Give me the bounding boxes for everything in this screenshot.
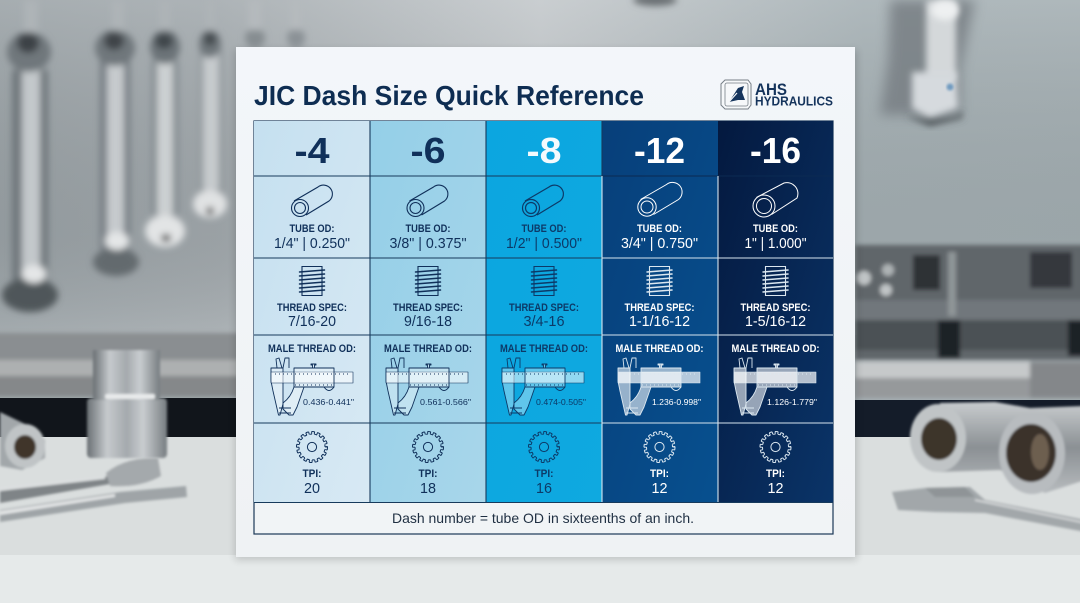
icon: tube [638, 182, 682, 216]
tube OD [621, 223, 698, 252]
icon: caliper [386, 358, 468, 415]
shelf, left [0, 333, 240, 397]
thread spec: THREAD SPEC: [277, 302, 347, 314]
thread spec: THREAD SPEC: [624, 302, 694, 314]
icon: thread [647, 266, 672, 296]
thread spec: 3/4-16 [524, 313, 564, 330]
thread spec: THREAD SPEC: [509, 302, 579, 314]
tube OD: TUBE OD: [522, 223, 566, 235]
icon: thread [300, 266, 324, 296]
male thread OD label: MALE THREAD OD: [500, 343, 588, 355]
reference card [236, 47, 855, 557]
thread spec: THREAD SPEC: [740, 302, 810, 314]
icon: caliper [271, 358, 353, 415]
icon: caliper [502, 358, 584, 415]
table surface [0, 437, 1080, 603]
dash number: -6 [410, 130, 446, 171]
male thread OD label: MALE THREAD OD: [268, 343, 356, 355]
logo: AHS Hydraulics [721, 80, 833, 109]
logo wordmark: AHS [755, 80, 787, 99]
thread spec [277, 302, 347, 330]
socket, left centre [87, 350, 167, 458]
wall [0, 0, 1080, 335]
column: -6 [370, 121, 486, 502]
logo wordmark [755, 80, 833, 108]
icon: thread [416, 266, 440, 296]
icon: caliper [734, 358, 816, 415]
male thread OD value: 0.474-0.505" [536, 397, 586, 407]
icon: gear [412, 432, 444, 462]
TPI: 12 [768, 480, 784, 497]
TPI [302, 468, 322, 497]
thread spec: THREAD SPEC: [393, 302, 463, 314]
tube OD: TUBE OD: [406, 223, 450, 235]
thread spec [393, 302, 463, 330]
thread spec: 1-1/16-12 [629, 313, 690, 330]
tube OD [744, 223, 806, 252]
column: -16 [718, 121, 833, 502]
tube OD [390, 223, 466, 252]
column: -4 [254, 121, 370, 502]
card shadow [235, 50, 857, 560]
male thread OD value: 0.561-0.566" [420, 397, 471, 407]
male thread OD label: MALE THREAD OD: [384, 343, 472, 355]
column: -8 [486, 121, 602, 502]
icon: caliper [618, 358, 700, 415]
dash number: -12 [634, 130, 685, 171]
tube OD: 3/8" | 0.375" [390, 235, 466, 252]
dash number: -8 [526, 130, 562, 171]
icon: gear [296, 432, 328, 462]
icon: thread [532, 266, 556, 296]
shelf base, left [0, 398, 240, 438]
tube OD [274, 223, 350, 252]
icon: gear [760, 432, 791, 462]
icon: gear [644, 432, 675, 462]
hanging wrenches, left [2, 0, 677, 312]
table panel [254, 121, 833, 534]
hanging fitting, right [880, 0, 975, 126]
male thread OD label: MALE THREAD OD: [732, 343, 820, 355]
footnote: Dash number = tube OD in sixteenths of an inch. [392, 510, 694, 526]
tube OD: 1" | 1.000" [744, 235, 806, 252]
title: JIC Dash Size Quick Reference [254, 80, 644, 111]
TPI: TPI: [766, 468, 785, 480]
TPI: 16 [536, 480, 552, 497]
TPI: 20 [304, 480, 320, 497]
male thread OD value: 0.436-0.441" [303, 397, 354, 407]
TPI: TPI: [534, 468, 554, 480]
icon: tube [292, 185, 332, 216]
column: -12 [602, 121, 718, 502]
thread spec [624, 302, 694, 330]
TPI [534, 468, 554, 497]
sockets, right [910, 402, 1080, 494]
thread spec: 1-5/16-12 [745, 313, 806, 330]
thread spec [740, 302, 810, 330]
shelf, right [855, 245, 1080, 398]
icon: tube [407, 185, 448, 216]
logo badge icon [721, 80, 751, 109]
TPI: TPI: [418, 468, 438, 480]
tube OD: TUBE OD: [290, 223, 334, 235]
icon: tube [753, 183, 798, 217]
tube OD: TUBE OD: [637, 223, 682, 235]
tube OD: 3/4" | 0.750" [621, 235, 698, 252]
card sheet [236, 47, 855, 557]
thread spec: 7/16-20 [288, 313, 336, 330]
male thread OD value: 1.236-0.998" [652, 397, 701, 407]
TPI: 18 [420, 480, 436, 497]
dash number: -4 [294, 130, 330, 171]
wrenches, lower left [0, 458, 187, 522]
TPI [766, 468, 785, 497]
logo wordmark: HYDRAULICS [755, 94, 833, 108]
tube OD: 1/4" | 0.250" [274, 235, 350, 252]
table body [254, 121, 833, 534]
TPI: TPI: [302, 468, 322, 480]
socket, far left [0, 412, 45, 470]
TPI [418, 468, 438, 497]
dash number: -16 [750, 130, 801, 171]
TPI [650, 468, 669, 497]
thread spec: 9/16-18 [404, 313, 452, 330]
shelf base, right [855, 400, 1080, 438]
icon: tube [522, 185, 563, 216]
tube OD [506, 223, 582, 252]
wrench, lower right [892, 487, 1080, 532]
tube OD: TUBE OD: [753, 223, 798, 235]
male thread OD value: 1.126-1.779" [767, 397, 817, 407]
tube OD: 1/2" | 0.500" [506, 235, 582, 252]
icon: thread [763, 266, 788, 296]
icon: gear [528, 432, 560, 462]
TPI: 12 [652, 480, 668, 497]
TPI: TPI: [650, 468, 669, 480]
thread spec [509, 302, 579, 330]
male thread OD label: MALE THREAD OD: [616, 343, 704, 355]
